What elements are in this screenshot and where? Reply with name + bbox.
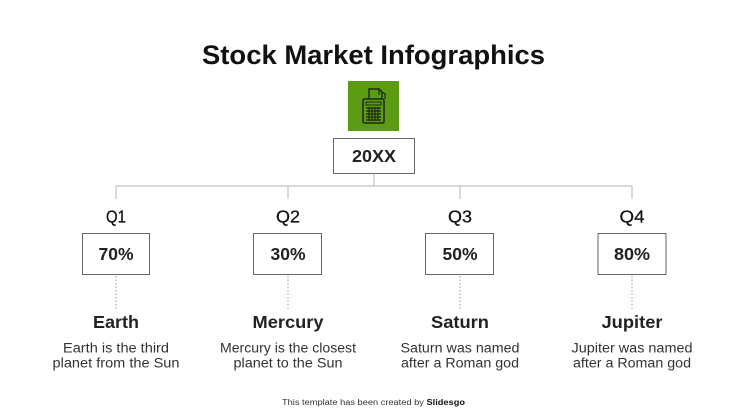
title: Stock Market Infographics: [202, 40, 545, 70]
column: Q3 Saturn: [400, 206, 520, 370]
column: Q3 Saturn: after a Roman god: [401, 356, 519, 370]
icon: calculator on green square: [348, 81, 399, 131]
column: Q3 Saturn: Q3: [448, 206, 472, 226]
column: Q4 Jupiter: Jupiter was named: [572, 340, 692, 356]
year box: 20XX: [352, 146, 396, 166]
column: Q4 Jupiter: after a Roman god: [573, 356, 691, 370]
column: Q2 Mercury: 30%: [270, 244, 306, 264]
column: Q4 Jupiter: 80%: [614, 244, 650, 264]
column: Q1 Earth: 70%: [98, 244, 134, 264]
column: Q4 Jupiter: Jupiter: [602, 312, 663, 332]
footer credit: This template has been created by Slidesgo: [282, 398, 465, 407]
column: Q4 Jupiter: [572, 206, 692, 370]
column: Q1 Earth: [52, 206, 180, 370]
column: Q2 Mercury: planet to the Sun: [234, 356, 342, 370]
column: Q1 Earth: Earth is the third: [63, 340, 169, 356]
column: Q2 Mercury: Mercury is the closest: [220, 340, 356, 356]
column: Q3 Saturn: Saturn was named: [400, 340, 520, 356]
column: Q1 Earth: planet from the Sun: [52, 356, 180, 370]
column: Q3 Saturn: 50%: [442, 244, 478, 264]
year box: [334, 138, 414, 174]
column: Q1 Earth: Q1: [106, 206, 126, 226]
connector tree: [116, 174, 632, 199]
column: Q2 Mercury: [220, 206, 356, 370]
column: Q2 Mercury: Mercury: [252, 312, 324, 332]
column: Q4 Jupiter: Q4: [620, 206, 645, 226]
column: Q1 Earth: Earth: [93, 312, 139, 332]
column: Q2 Mercury: Q2: [276, 206, 300, 226]
column: Q3 Saturn: Saturn: [431, 312, 489, 332]
